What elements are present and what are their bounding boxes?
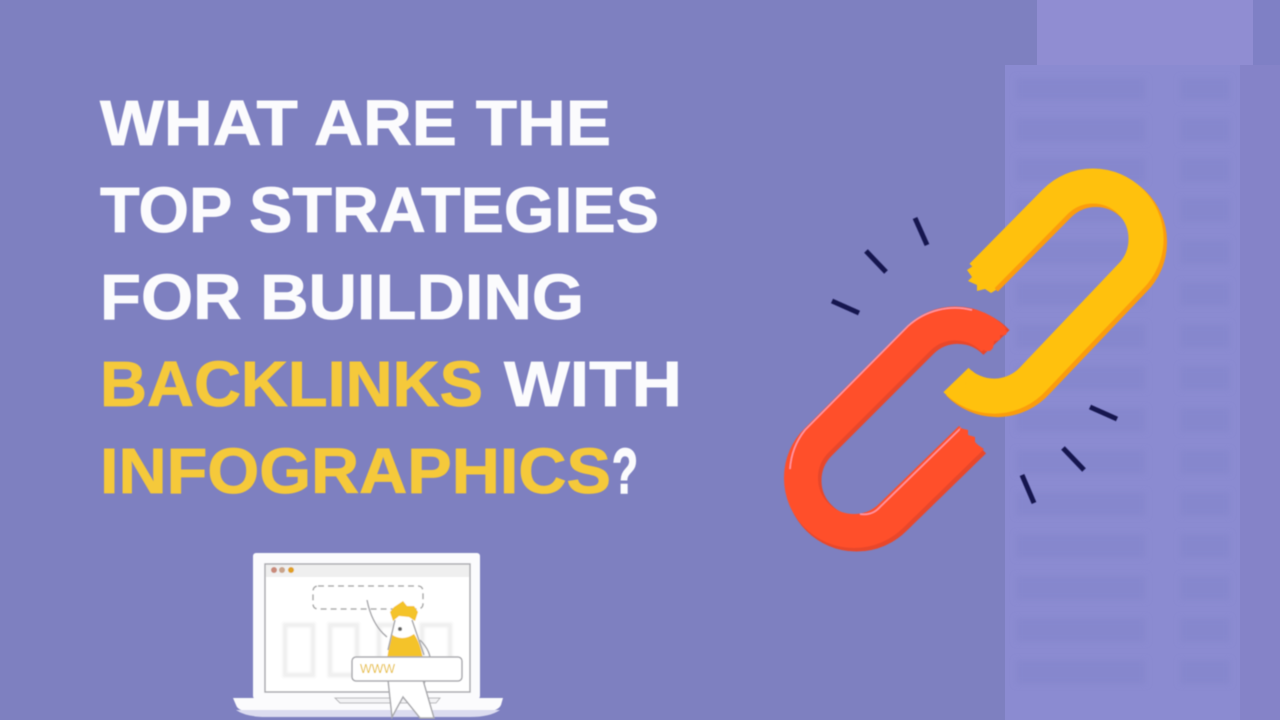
title: WHAT ARE THE [100,87,611,159]
title: INFOGRAPHICS [100,435,611,507]
burst dashes: upper left [832,218,927,313]
title: ? [612,435,638,507]
laptop base [233,698,503,711]
title: WITH [504,348,682,420]
laptop screen [265,564,470,692]
red link [790,308,1007,534]
content cards [285,625,450,675]
illustration: laptop with character [233,553,503,718]
laptop lid [253,553,480,699]
icon: broken chain link [790,186,1149,534]
dashed box [313,586,423,609]
www bar: WWW [360,661,396,676]
www bar [352,657,462,681]
title [100,87,682,507]
character [367,600,434,718]
title: BACKLINKS [100,348,483,420]
title: TOP STRATEGIES [100,174,659,246]
title: FOR BUILDING [100,261,584,333]
burst dashes: lower right [1022,407,1117,503]
yellow link [946,186,1149,400]
background building [1005,0,1280,720]
